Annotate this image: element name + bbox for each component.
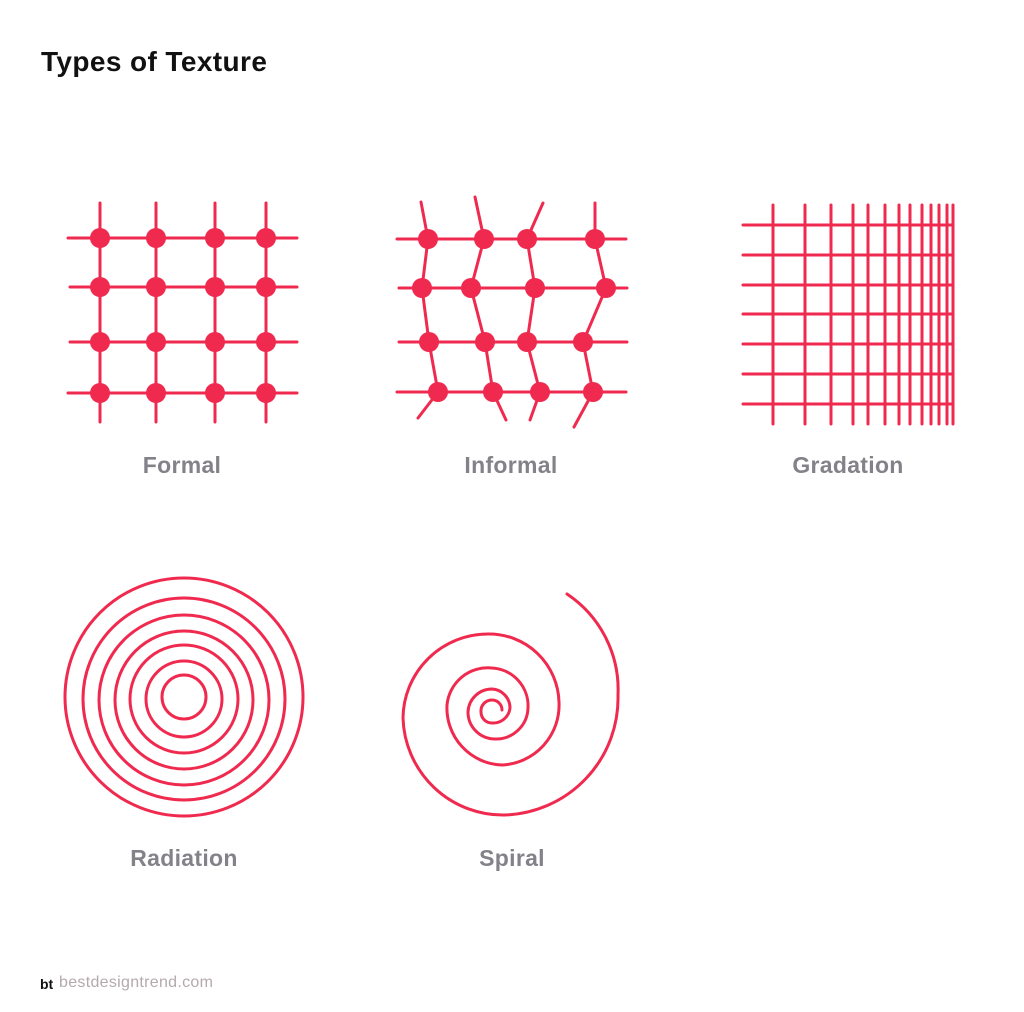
panel: radiation circles [65, 578, 303, 816]
title: Types of Texture [41, 46, 267, 77]
panel: informal grid [397, 197, 627, 427]
panel: spiral [403, 594, 618, 815]
panel: gradation grid [743, 205, 953, 424]
label: formal: Formal [143, 452, 221, 478]
footer: logo and url [40, 974, 213, 992]
panel: formal grid [68, 203, 297, 422]
icon: logo: bt [40, 976, 53, 992]
footer url: bestdesigntrend.com [59, 974, 213, 991]
label: radiation: Radiation [130, 845, 238, 871]
label: gradation: Gradation [792, 452, 904, 478]
label: informal: Informal [464, 452, 558, 478]
label: spiral: Spiral [479, 845, 545, 871]
